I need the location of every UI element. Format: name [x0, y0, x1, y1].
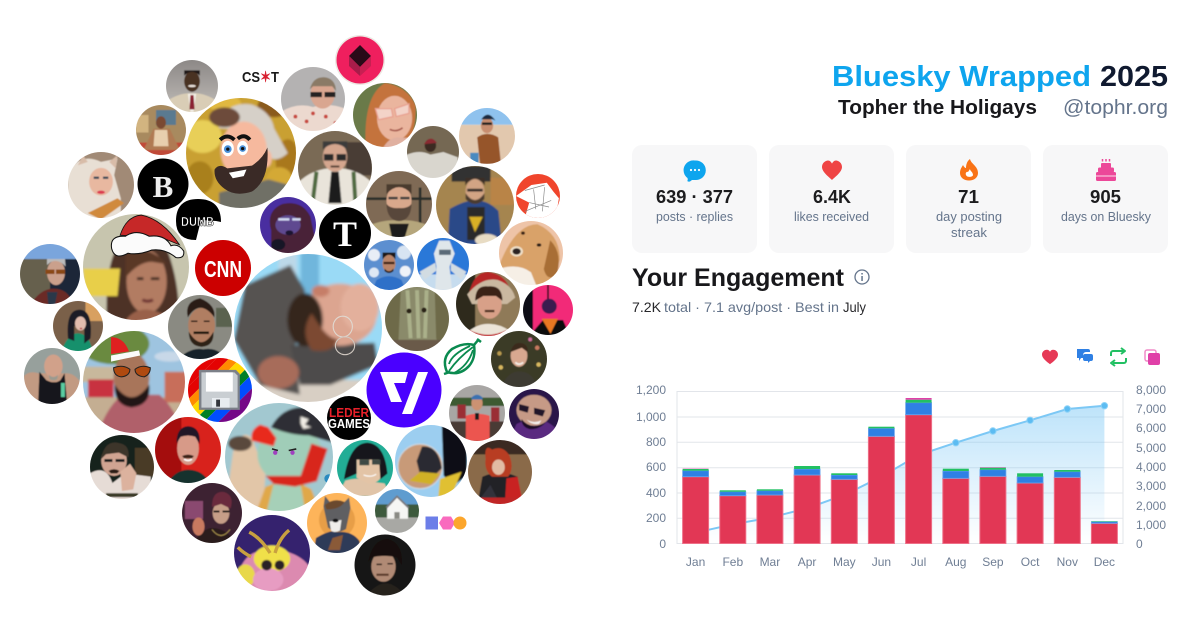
month labels: Aug — [945, 555, 966, 569]
month labels: Jul — [911, 555, 926, 569]
avatar: man in black beanie — [351, 531, 419, 599]
avatar: pirate green cartoon with ferret — [225, 403, 333, 511]
avatar: man with dark hair and beard — [168, 295, 232, 359]
bars: likes — [683, 415, 1117, 544]
logo: CNN: CNN — [204, 256, 242, 282]
panel: day posting streak: 71 — [958, 187, 979, 207]
avatar: white monster on blue — [417, 238, 469, 290]
icon: flame — [960, 159, 978, 180]
avatar: goth woman with teal top — [53, 301, 103, 351]
avatar: laughing man with glasses purple light — [509, 389, 559, 439]
chart grid — [677, 391, 1123, 544]
icon: legend reposts — [1111, 348, 1126, 366]
logo: Leder Games: LEDER — [329, 406, 369, 420]
avatar: cartoon man with cap on gold coins — [186, 98, 296, 208]
icon: heart — [822, 160, 842, 180]
avatar: person on beach — [459, 108, 515, 164]
month labels: Jan — [686, 555, 705, 569]
avatar: man with suspenders — [298, 131, 372, 205]
logo: CNN — [195, 240, 251, 296]
panel: day posting streak: streak — [951, 225, 988, 240]
left axis labels: 0 — [659, 537, 666, 551]
panel: posts and replies: 639 · 377 — [656, 187, 733, 207]
avatar: bald man in tank top — [24, 348, 80, 404]
avatar: man before christmas tree — [491, 331, 547, 387]
heading: Your Engagement: Your Engagement — [632, 264, 845, 292]
icon: info — [855, 270, 869, 284]
left axis labels: 800 — [646, 435, 666, 449]
bars: quotes — [683, 398, 1006, 469]
left axis labels: 200 — [646, 511, 666, 525]
month labels: Oct — [1021, 555, 1040, 569]
month labels — [686, 555, 1115, 569]
avatar cloud — [17, 35, 575, 599]
icon: legend heart — [1042, 350, 1058, 364]
avatar: white church — [373, 487, 421, 535]
avatar: red haired woman — [353, 83, 417, 147]
month labels: Mar — [760, 555, 780, 569]
left axis labels: 600 — [646, 460, 666, 474]
right axis labels — [1136, 383, 1166, 551]
logo: CS*T: CS✶T — [242, 69, 279, 86]
month labels: Nov — [1057, 555, 1078, 569]
logo: purple V — [366, 352, 442, 428]
month labels: Dec — [1094, 555, 1115, 569]
chart: monthly engagement — [636, 383, 1166, 569]
bars: reposts — [683, 400, 1117, 522]
logo: Leder Games: GAMES — [328, 417, 370, 431]
avatar: red line art — [516, 174, 560, 218]
avatar: man in floral shirt — [281, 67, 345, 131]
avatar: man in red cap with hoodie — [407, 126, 459, 178]
right axis labels: 8,000 — [1136, 383, 1166, 397]
icon: cake — [1096, 159, 1116, 181]
panel: days on Bluesky: days on Bluesky — [1061, 209, 1151, 224]
logo: New York Times T: T — [333, 214, 357, 254]
avatar: wolf furry on orange — [307, 493, 367, 553]
panel: days on Bluesky: 905 — [1090, 187, 1121, 207]
avatar: man in blue patterned shirt — [364, 240, 414, 290]
right axis labels: 5,000 — [1136, 441, 1166, 455]
bars: replies — [683, 403, 1117, 523]
left axis labels: 1,200 — [636, 383, 666, 397]
avatar: man in cream suit — [166, 60, 218, 112]
avatar: pink and black ornament — [523, 285, 573, 335]
logo: Dumb speech bubble — [176, 199, 221, 240]
right axis labels: 3,000 — [1136, 479, 1166, 493]
logo: New York Times T — [319, 207, 371, 259]
avatar: red haired anime character — [468, 440, 532, 504]
avatar: rainbow floppy disk — [188, 358, 252, 422]
display name and handle: Topher the Holigays — [838, 97, 1037, 119]
month labels: Sep — [982, 555, 1004, 569]
panel: likes received: likes received — [794, 209, 869, 224]
logo: Leder Games — [327, 396, 371, 440]
avatar: purple comic character — [260, 197, 316, 253]
avatar: man in apron in kitchen — [136, 105, 186, 155]
avatar: man in red shirt selfie — [449, 385, 505, 441]
right axis labels: 7,000 — [1136, 402, 1166, 416]
icon: chat bubble — [684, 160, 706, 182]
panel: days on Bluesky — [1043, 145, 1168, 253]
avatar: pink and yellow moth — [234, 515, 310, 591]
logo: Dumb speech bubble: DUMB — [181, 214, 214, 229]
engagement summary: 7.2K — [632, 299, 662, 315]
logo: pink polygon — [335, 35, 385, 85]
avatar: woman with santa hat — [83, 214, 189, 320]
engagement summary: July — [843, 299, 866, 315]
right axis labels: 4,000 — [1136, 460, 1166, 474]
left axis labels — [636, 383, 666, 551]
avatar: young man with santa hat — [456, 272, 520, 336]
right axis labels: 1,000 — [1136, 518, 1166, 532]
icon: legend replies — [1077, 349, 1093, 363]
avatar: person with maroon beanie — [182, 483, 242, 543]
avatar: man with amber sunglasses — [20, 244, 80, 304]
avatar: golden dog — [499, 221, 563, 285]
right axis labels: 6,000 — [1136, 421, 1166, 435]
chart legend icons — [1042, 348, 1160, 366]
display name and handle: @tophr.org — [1063, 97, 1168, 119]
panel: day posting streak: day posting — [936, 209, 1002, 224]
avatar: man with mustache and hand on chin — [90, 435, 154, 499]
right axis labels: 2,000 — [1136, 499, 1166, 513]
avatar: smiling bearded man — [366, 171, 432, 237]
month labels: Apr — [798, 555, 816, 569]
logo: blue square pink hexagon orange circle — [426, 516, 466, 530]
icon: legend quotes — [1145, 350, 1160, 365]
cumulative area and line — [696, 402, 1108, 544]
panel: likes received — [769, 145, 894, 253]
avatar: man with santa hat and orange shades — [83, 331, 185, 433]
panel: posts and replies: posts · replies — [656, 209, 733, 224]
display name and handle — [838, 97, 1168, 119]
avatar: smiling man on red — [155, 417, 221, 483]
right axis labels: 0 — [1136, 537, 1143, 551]
month labels: May — [833, 555, 856, 569]
left axis labels: 400 — [646, 486, 666, 500]
avatar: Kronk cartoon with sunglasses — [337, 440, 393, 496]
left axis labels: 1,000 — [636, 410, 666, 424]
avatar: tree with face — [385, 287, 449, 351]
title: Bluesky Wrapped — [832, 61, 1091, 93]
panel: posts and replies — [632, 145, 757, 253]
panel: day posting streak — [906, 145, 1031, 253]
month labels: Jun — [872, 555, 891, 569]
month labels: Feb — [722, 555, 743, 569]
panel: likes received: 6.4K — [813, 187, 851, 207]
logo: onion — [444, 339, 481, 374]
avatar: mirror selfie — [395, 425, 467, 497]
avatar: man in plaid shirt and yellow tee — [436, 166, 514, 244]
avatar: white cat woman — [68, 152, 134, 218]
logo: B — [138, 158, 188, 210]
title: 2025 — [1100, 61, 1168, 93]
engagement summary: total · 7.1 avg/post · Best in — [664, 299, 839, 315]
avatar: main man lying on arm — [234, 254, 382, 402]
logo: B: B — [153, 169, 173, 204]
